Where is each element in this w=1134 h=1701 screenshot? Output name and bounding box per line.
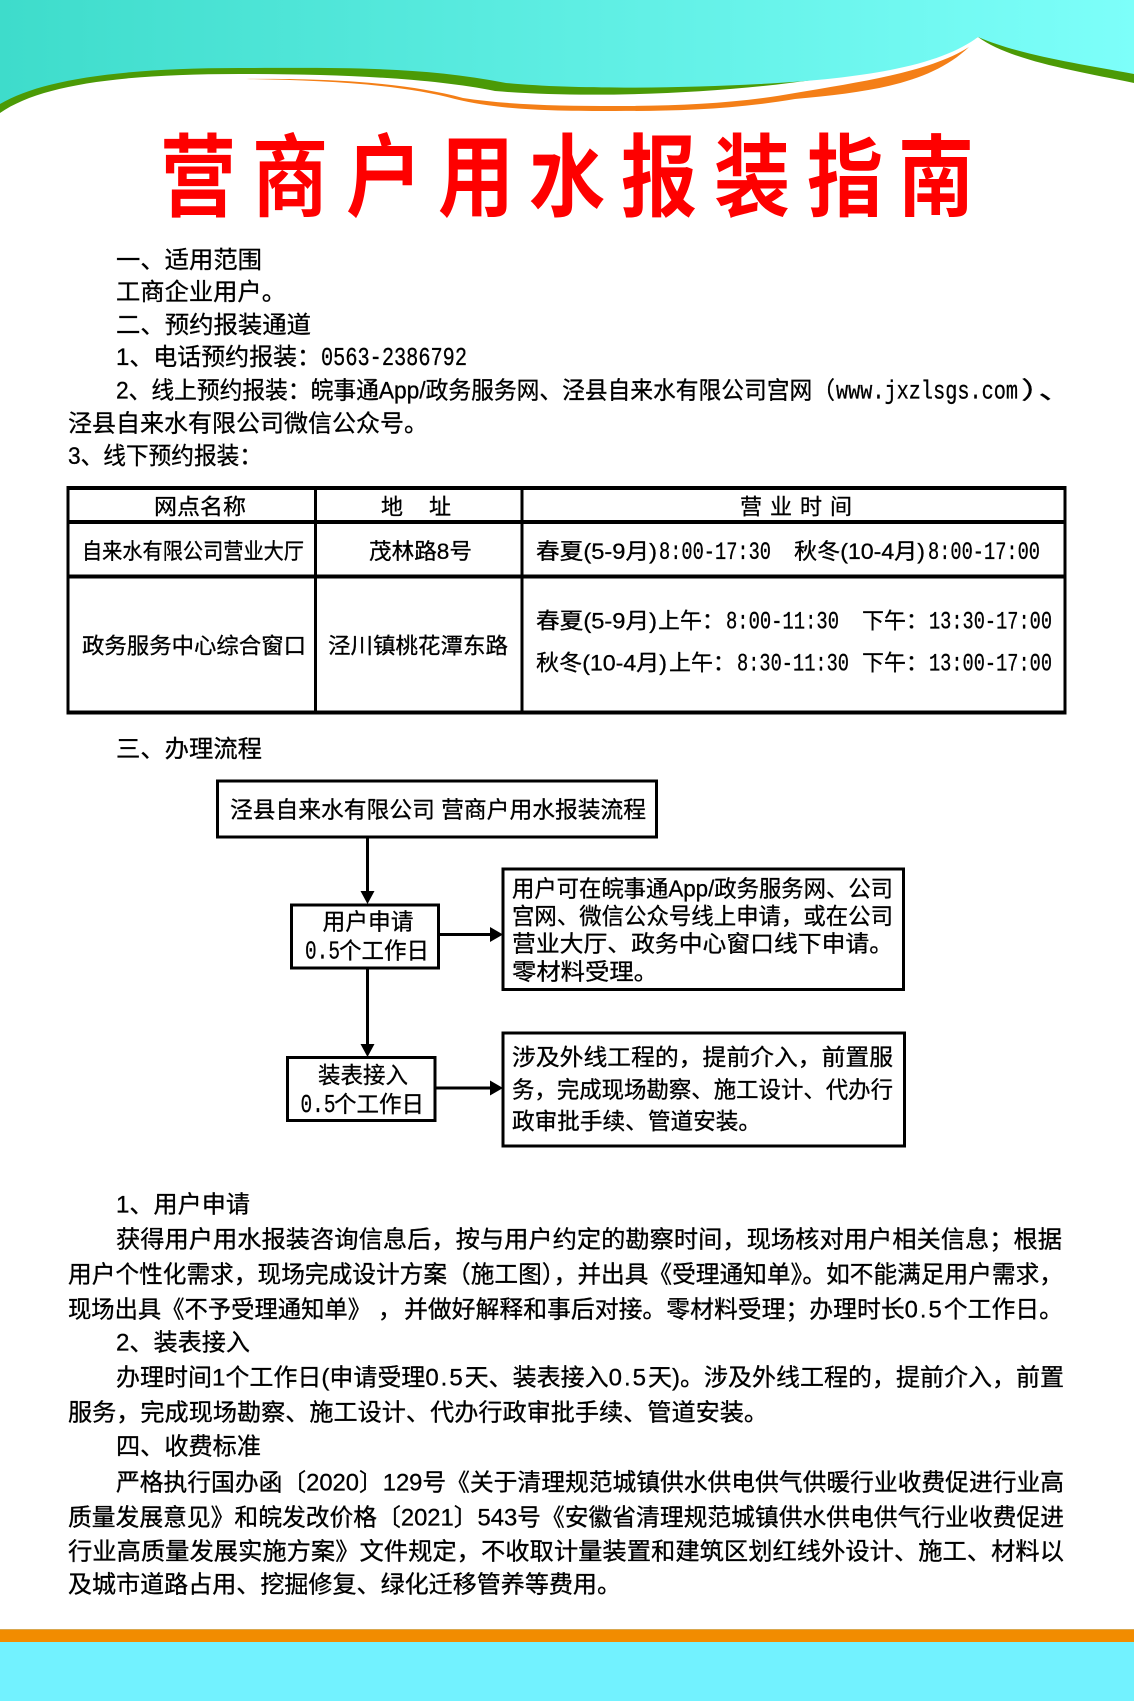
flow box: user application — [292, 905, 438, 968]
text block: scope and booking channels: ）、 — [1021, 378, 1073, 404]
flow box: title: 泾县自来水有限公司 营商户用水报装流程 — [230, 796, 646, 822]
flow box: application detail: 用户可在皖事通App/政务服务网、公司 — [512, 876, 893, 902]
flow box: application detail: 宫网、微信公众号线上申请，或在公司 — [512, 903, 893, 929]
text block: fee standards: 及城市道路占用、挖掘修复、绿化迁移管养等费用。 — [68, 1572, 621, 1598]
flow box: installation detail: 涉及外线工程的，提前介入，前置服 — [512, 1044, 893, 1070]
table row: government service center: 上午： — [658, 608, 724, 634]
text block: fee standards: 质量发展意见》和皖发改价格〔2021〕543号《安徽省清理规范城镇供水供电供气行业收费促进 — [68, 1504, 1064, 1532]
flow box: user application: 0.5 — [305, 936, 340, 966]
table row: business hall: 8:00-17:00 — [928, 538, 1040, 567]
table row: government service center: 春夏(5-9月) — [536, 608, 657, 634]
heading: process: 三、办理流程 — [116, 736, 262, 763]
arrow: install to detail — [435, 1080, 503, 1096]
table row: government service center: 8:30-11:30 — [737, 650, 849, 678]
text block: scope and booking channels: 2、线上预约报装：皖事通App/政务服务网、泾县自来水有限公司宫网（ — [116, 378, 835, 404]
flow box: meter installation — [288, 1058, 435, 1120]
text block: fee standards: 四、收费标准 — [116, 1434, 261, 1460]
text block: process details: 获得用户用水报装咨询信息后，按与用户约定的勘察时间，现场核对用户相关信息；根据 — [116, 1226, 1062, 1254]
table row: government service center: 秋冬(10-4月) — [536, 650, 667, 676]
flow box: title — [218, 781, 656, 837]
text block: process details: ， — [378, 1296, 402, 1324]
table row: business hall: 8:00-17:30 — [659, 538, 771, 567]
table row: government service center: 上午： — [669, 650, 735, 676]
table row: business hall: 春夏(5-9月) — [536, 539, 657, 564]
text block: process details: 现场出具《不予受理通知单》 — [68, 1296, 371, 1324]
flow box: meter installation: 装表接入 — [318, 1062, 408, 1088]
table row: government service center: 下午： — [862, 608, 928, 634]
header wave banner — [0, 0, 1134, 113]
title: 营商户用水报装指南 — [160, 128, 974, 228]
table row: government service center: 政务服务中心综合窗口 — [82, 634, 306, 658]
table row: government service center: 下午： — [862, 650, 928, 676]
text block: scope and booking channels: 3、线下预约报装： — [68, 443, 262, 470]
flow box: meter installation: 0.5 — [300, 1090, 336, 1120]
flowchart — [218, 781, 904, 1146]
table header: 网点名称 — [154, 494, 246, 520]
text block: scope and booking channels: 泾县自来水有限公司微信公众号。 — [68, 410, 428, 438]
table header: 营业时间 — [740, 494, 852, 520]
text block: scope and booking channels: 一、适用范围 — [116, 247, 262, 274]
table header: 地 — [381, 494, 403, 520]
table: offline service points — [66, 486, 1066, 714]
text block: fee standards: 行业高质量发展实施方案》文件规定，不收取计量装置和建筑区划红线外设计、施工、材料以 — [68, 1538, 1064, 1566]
text block: scope and booking channels: 1、电话预约报装： — [116, 344, 321, 371]
flow box: application detail: 营业大厅、政务中心窗口线下申请。 — [512, 930, 893, 956]
table row: business hall: 秋冬(10-4月) — [794, 539, 925, 564]
flow box: application detail — [503, 869, 904, 990]
flow box: user application: 用户申请 — [322, 908, 414, 934]
text block: process details: 服务，完成现场勘察、施工设计、代办行政审批手续、管道安装。 — [68, 1400, 768, 1426]
text block: process details: 用户个性化需求，现场完成设计方案（施工图），并出具《受理通知单》。如不能满足用户需求， — [68, 1262, 1063, 1288]
table row: government service center — [82, 608, 1052, 678]
text block: process details: 办理时间1个工作日(申请受理0.5天、装表接入0.5天)。涉及外线工程的，提前介入，前置 — [116, 1364, 1064, 1392]
text block: process details: 2、装表接入 — [116, 1330, 250, 1356]
table header — [154, 494, 852, 520]
footer band — [0, 1629, 1134, 1701]
text block: process details: 并做好解释和事后对接。零材料受理；办理时长0.5个工作日。 — [404, 1296, 1063, 1324]
table row: government service center: 13:00-17:00 — [929, 650, 1052, 678]
arrow: title to apply — [360, 838, 374, 904]
table row: government service center: 8:00-11:30 — [726, 608, 839, 636]
table row: business hall: 自来水有限公司营业大厅 — [82, 539, 304, 564]
table row: government service center: 泾川镇桃花潭东路 — [328, 634, 508, 658]
text block: scope and booking channels — [68, 247, 1073, 470]
text block: process details: 1、用户申请 — [116, 1192, 250, 1218]
table header: 址 — [429, 494, 451, 520]
text block: fee standards: 严格执行国办函〔2020〕129号《关于清理规范城镇供水供电供气供暖行业收费促进行业高 — [116, 1470, 1064, 1496]
arrow: apply to install — [360, 968, 374, 1057]
table row: business hall: 茂林路8号 — [369, 539, 472, 564]
flow box: installation detail: 政审批手续、管道安装。 — [512, 1108, 761, 1134]
text block: process details — [68, 1192, 1064, 1426]
text block: fee standards — [68, 1434, 1064, 1598]
table row: business hall — [82, 538, 1040, 567]
text block: scope and booking channels: 二、预约报装通道 — [116, 312, 311, 339]
arrow: apply to detail — [439, 927, 503, 942]
flow box: installation detail: 务，完成现场勘察、施工设计、代办行 — [512, 1076, 893, 1102]
flow box: application detail: 零材料受理。 — [512, 958, 658, 984]
flow box: installation detail — [503, 1033, 904, 1146]
flow box: meter installation: 个工作日 — [334, 1091, 424, 1117]
text block: scope and booking channels: www.jxzlsgs.com — [836, 376, 1018, 406]
table row: government service center: 13:30-17:00 — [929, 608, 1052, 636]
text block: scope and booking channels: 0563-2386792 — [321, 343, 467, 373]
text block: scope and booking channels: 工商企业用户。 — [116, 279, 286, 306]
flow box: user application: 个工作日 — [339, 938, 429, 964]
